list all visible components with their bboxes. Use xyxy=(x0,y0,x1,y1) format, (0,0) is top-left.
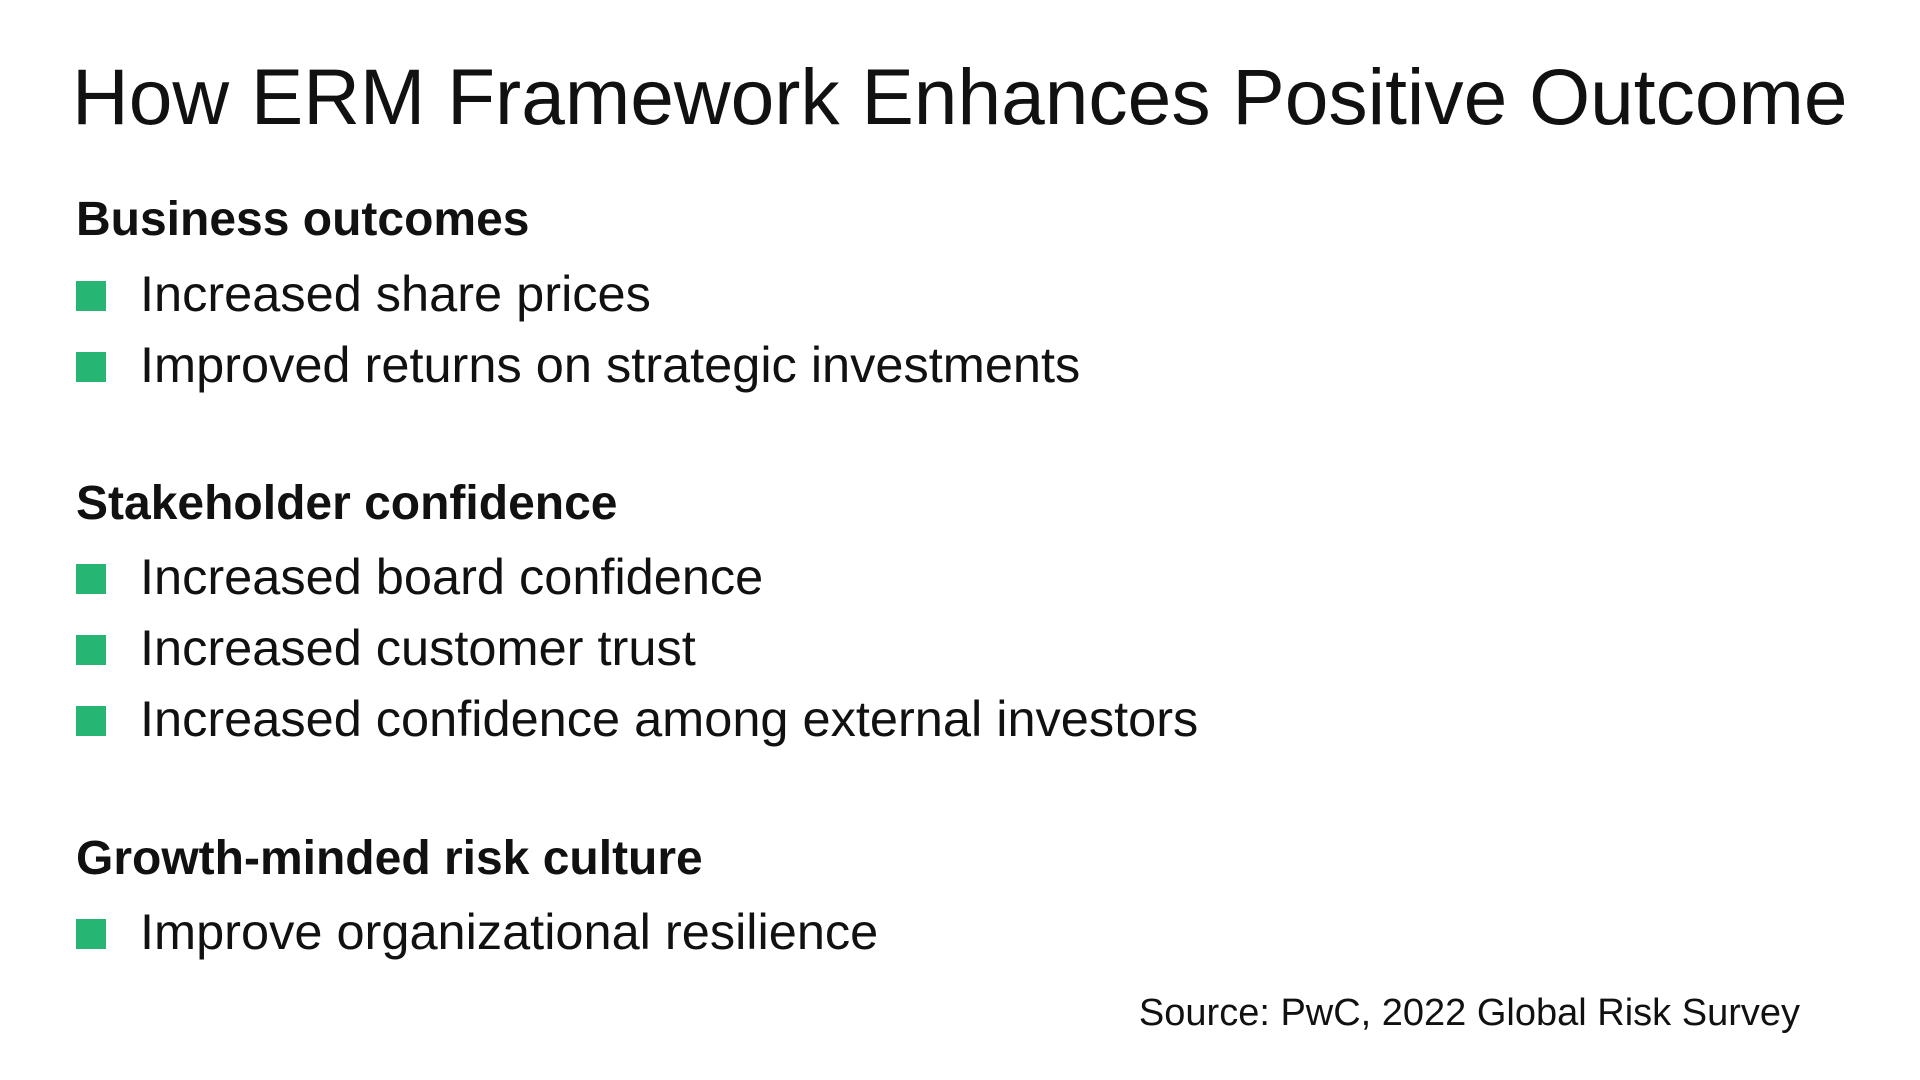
heading: growth-minded risk culture: Growth-minded risk culture xyxy=(76,832,703,885)
heading: stakeholder confidence: Stakeholder confidence xyxy=(76,477,617,530)
bullet: board confidence: Increased board confidence xyxy=(140,548,763,605)
heading: business outcomes: Business outcomes xyxy=(76,193,529,246)
bullet: customer trust: Increased customer trust xyxy=(140,619,696,676)
title: How ERM Framework Enhances Positive Outcome xyxy=(72,53,1848,141)
bullet: external investors: Increased confidence among external investors xyxy=(140,690,1198,747)
bullet: share prices: Increased share prices xyxy=(140,265,651,322)
source note: Source: PwC, 2022 Global Risk Survey xyxy=(1139,992,1800,1034)
bullet: strategic investments: Improved returns on strategic investments xyxy=(140,336,1080,393)
bullet: resilience: Improve organizational resilience xyxy=(140,903,878,960)
